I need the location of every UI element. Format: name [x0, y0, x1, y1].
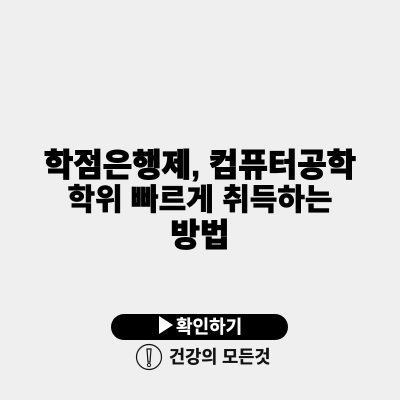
- button icon: play triangle: [159, 316, 173, 334]
- title: 학위 빠르게 취득하는: [67, 184, 333, 217]
- title: 학점은행제, 컴퓨터공학: [44, 147, 356, 183]
- title: 방법: [171, 217, 229, 253]
- title: [44, 147, 356, 253]
- brand row: [136, 344, 270, 370]
- icon: exclamation circle: [136, 344, 162, 370]
- button: confirm: [111, 314, 288, 340]
- button label: 확인하기: [176, 317, 242, 337]
- brand name: 건강의 모든것: [169, 347, 270, 367]
